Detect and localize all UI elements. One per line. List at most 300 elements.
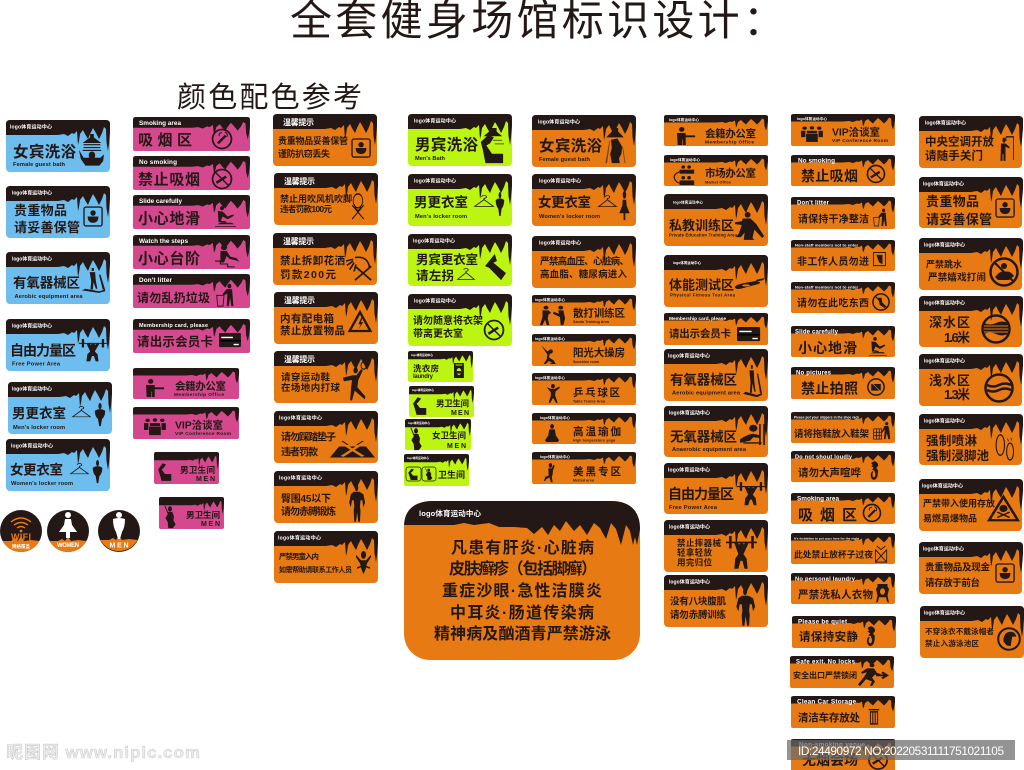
sign: anaerobic orange: logo体育运动中心 xyxy=(669,410,710,416)
sign: membership office pink: 会籍办公室 xyxy=(175,380,226,392)
icon: player xyxy=(547,384,560,403)
sign: cups overnight: 此处禁止放杯子过夜 xyxy=(794,548,873,560)
sign: slippers xyxy=(791,412,895,443)
sign: no boys: logo体育运动中心 xyxy=(278,534,321,542)
sign: table tennis: logo体育运动中心 xyxy=(535,375,565,380)
sign: toilet lime xyxy=(404,454,469,486)
sign: turn left lime: 男宾更衣室 xyxy=(416,252,478,267)
sign: membership card orange xyxy=(664,313,768,345)
sign: no shower disassembly: 罚款200元 xyxy=(280,268,336,281)
sign: shower mandatory: 强制浸脚池 xyxy=(926,448,989,463)
sign: market office xyxy=(664,155,768,186)
sign: hot yoga: High temperature yoga xyxy=(573,438,615,442)
sign: keep clean: 请保持干净整洁 xyxy=(798,212,869,226)
sign: smoke free venue: Non-smoking venue xyxy=(799,742,865,748)
sign: membership office pink xyxy=(133,368,239,399)
sign: men locker: 男更衣室 xyxy=(12,405,66,421)
sign: aerobic area xyxy=(6,252,110,304)
icon: lifter xyxy=(726,536,757,569)
sign: female guest bath: 女宾洗浴 xyxy=(13,142,76,161)
sign: no shower disassembly: 温馨提示 xyxy=(283,236,314,246)
icon: no swim play xyxy=(990,258,1018,286)
sign: no smoking orange: 禁止吸烟 xyxy=(801,168,858,184)
sign: table tennis xyxy=(532,373,636,405)
icon: man xyxy=(413,397,426,415)
sign: staff only xyxy=(791,240,895,271)
sign: no throwing weights xyxy=(664,520,768,572)
sign: shirtless under size xyxy=(274,471,378,523)
sign: smoking orange: 吸 烟 区 xyxy=(798,507,857,524)
heading: colour reference: 颜色配色参考 xyxy=(177,81,362,114)
sign: shower mandatory xyxy=(919,414,1023,465)
sign: membership card pink: Membership card, please xyxy=(139,323,208,329)
icon: feet xyxy=(996,435,1014,460)
sign: shower mandatory: 强制喷淋 xyxy=(926,433,977,448)
sign: membership office orange: Membership Office xyxy=(705,140,754,146)
icon: badminton xyxy=(343,362,366,400)
icon: washer xyxy=(454,363,464,378)
icon: ear xyxy=(867,626,875,646)
notice text xyxy=(434,538,611,643)
sign: women locker orange: logo体育运动中心 xyxy=(539,178,581,184)
icon: door xyxy=(873,252,885,266)
sign: female guest bath: logo体育运动中心 xyxy=(10,124,52,130)
sign: men toilet lime xyxy=(409,386,474,417)
sign: men locker lime xyxy=(408,174,512,226)
sign: no shirtless: 没有八块腹肌 xyxy=(670,596,726,608)
sign: no pictures: No pictures xyxy=(796,370,832,376)
sign: no hair dryer on feet: 禁止用吹风机吹脚 xyxy=(280,193,352,204)
sign: aerobic orange xyxy=(664,349,768,401)
icon: plank xyxy=(735,278,765,289)
sign: no shouting xyxy=(791,451,895,482)
icon: card xyxy=(737,327,760,341)
icon: slip xyxy=(215,206,236,227)
sign: anaerobic orange xyxy=(664,406,768,457)
sign: men locker lime: logo体育运动中心 xyxy=(414,178,456,184)
icon: high voltage xyxy=(350,312,370,331)
sign: tanning: Melted area xyxy=(573,478,594,482)
panel: pool health notice xyxy=(404,501,640,660)
sign: women locker orange: 女更衣室 xyxy=(538,194,591,210)
sign: no personal laundry: No personal laundry xyxy=(795,576,856,582)
badge: women xyxy=(47,510,89,552)
sign: no shower disassembly xyxy=(273,233,377,285)
sign: slide orange xyxy=(791,326,895,357)
sign: men toilet pink 2 xyxy=(159,497,224,529)
icon: no photo xyxy=(868,379,884,395)
sign: valuables notice: 谨防扒窃丢失 xyxy=(278,148,330,159)
sign: sunshine: Sunshine room xyxy=(573,360,599,364)
sign: female guest bath xyxy=(6,120,110,172)
sign: flammables: 易燃易爆物品 xyxy=(923,512,977,524)
sign: mat: 违者罚款 xyxy=(281,446,318,458)
sign: valuables cash: 贵重物品及现金 xyxy=(925,562,990,574)
icon: no eating xyxy=(873,294,889,310)
sign: no personal laundry: 严禁洗私人衣物 xyxy=(798,588,874,601)
icon: weightlifter xyxy=(737,482,765,505)
icon: turn arrow xyxy=(485,254,506,280)
sign: smoking orange xyxy=(791,493,895,524)
sign: laundry lime: logo体育运动中心 xyxy=(411,353,433,357)
sign: men locker lime: Men's locker room xyxy=(415,214,467,220)
sign: female bath orange xyxy=(532,115,636,167)
icon: trash can xyxy=(869,710,879,724)
sign: valuables orange xyxy=(919,177,1023,228)
icon: woman xyxy=(411,428,422,450)
sign: electrical box: 内有配电箱 xyxy=(280,312,334,325)
sign: watch the steps pink: Watch the steps xyxy=(139,238,188,245)
sign: deep water: 1.6米 xyxy=(944,330,970,345)
sign: women locker: Women's locker room xyxy=(11,481,73,487)
sign: no personal laundry xyxy=(791,573,895,604)
sign: no shouting: 请勿大声喧哗 xyxy=(798,466,862,479)
icon: bin xyxy=(217,284,233,306)
sign: no smoking orange: No smoking xyxy=(798,158,835,164)
sign: no jumping: 严禁嬉戏打闹 xyxy=(928,272,986,284)
sign: no throwing weights: logo体育运动中心 xyxy=(669,524,710,530)
sign: men locker: logo体育运动中心 xyxy=(12,386,52,392)
sign: no smoking pink xyxy=(133,156,250,190)
sign: women toilet lime xyxy=(405,419,471,450)
sign: staff only: Non-staff members not to enter xyxy=(795,242,858,248)
sign: men toilet pink: 男卫生间 xyxy=(180,464,215,475)
badge: wifi: 网络覆盖 xyxy=(12,543,30,550)
sign: swimwear required: 不穿泳衣不戴泳帽者 xyxy=(925,626,994,636)
icon: treadmill xyxy=(743,365,762,397)
icon: meeting xyxy=(144,418,166,435)
sign: deep water: 深水区 xyxy=(929,315,970,330)
sign: deep water xyxy=(919,296,1023,347)
icon: hanger and man xyxy=(73,403,105,426)
sign: watch the steps pink xyxy=(133,235,250,269)
sign: market office: 市场办公室 xyxy=(705,166,756,180)
sign: fitness test xyxy=(664,255,768,307)
icon: muscle man xyxy=(349,484,365,522)
sign: electrical box: 禁止放置物品 xyxy=(280,324,345,337)
sign: free power: Free Power Area xyxy=(12,362,61,368)
sign: no shirtless xyxy=(664,575,768,627)
sign: hot yoga xyxy=(532,413,636,444)
sign: no hanger removal lime xyxy=(408,294,512,346)
icon: pointing person xyxy=(146,379,164,397)
sign: watch the steps pink: 小心台阶 xyxy=(138,250,200,268)
sign: membership office orange: 会籍办公室 xyxy=(705,127,756,140)
icon: muscle man xyxy=(736,588,755,626)
icon: woman xyxy=(165,506,176,528)
icon: hanger and woman xyxy=(599,191,630,220)
sign: slippers: 请将拖鞋放入鞋架 xyxy=(794,428,869,440)
sign: men's bath lime: Men's Bath xyxy=(415,156,446,162)
watermark: id bar: ID:24490972 NO:20220531111751021105 xyxy=(798,744,1004,758)
icon: deep water xyxy=(982,316,1010,342)
sign: membership office pink: Membership Office xyxy=(174,392,224,398)
sign: valuables orange: 贵重物品 xyxy=(926,194,979,209)
sign: mat xyxy=(274,411,378,463)
sign: fitness test: Physical Fitness Test Area xyxy=(670,292,735,298)
sign: slippers: Please put your slippers in the shoe rack xyxy=(794,416,859,420)
sign: sunshine: 阳光大操房 xyxy=(573,346,625,359)
sign: close door: logo体育运动中心 xyxy=(925,120,966,126)
icon: man xyxy=(158,463,171,481)
badge: wifi: WIFI xyxy=(11,532,31,542)
icon: men's shower xyxy=(481,128,504,163)
sign: men toilet pink 2: MEN xyxy=(201,521,220,528)
sign: no eating xyxy=(791,282,895,313)
icon: pointing person xyxy=(677,127,695,145)
icon: safe box xyxy=(84,207,102,226)
icon: crossed box xyxy=(875,546,887,562)
icon: bench press xyxy=(740,424,765,445)
sign: membership card pink: 请出示会员卡 xyxy=(137,334,213,349)
sign: table tennis: Table Tennis Area xyxy=(573,400,605,404)
sign: valuables cash: 请存放于前台 xyxy=(925,577,980,589)
notice text: 皮肤癣疹（包括脚癣） xyxy=(449,559,597,578)
sign: vip orange: logo体育运动中心 xyxy=(797,116,827,121)
sign: no throwing weights: 用完归位 xyxy=(677,558,712,568)
sign: men toilet lime: logo体育运动中心 xyxy=(412,388,434,392)
sign: valuables: logo体育运动中心 xyxy=(12,190,52,196)
sign: turn left lime xyxy=(408,234,512,286)
sign: no boys xyxy=(274,531,378,583)
sign: no smoking orange xyxy=(791,155,895,186)
sign: free power orange: 自由力量区 xyxy=(668,486,734,502)
sign: aerobic orange: logo体育运动中心 xyxy=(668,352,710,360)
sign: men locker: Men's locker room xyxy=(13,425,65,431)
icon: no hanger xyxy=(485,321,503,339)
sign: smoke free venue: 无烟会场 xyxy=(802,752,858,768)
sign: men locker lime: 男更衣室 xyxy=(414,194,468,210)
sign: valuables xyxy=(6,186,110,238)
sign: be quiet: Please be quiet xyxy=(798,618,847,626)
sign: valuables orange: 请妥善保管 xyxy=(926,212,992,227)
sign: vip room pink: VIP洽谈室 xyxy=(175,418,223,432)
sign: free power orange xyxy=(664,463,768,514)
sign: be quiet xyxy=(792,616,896,648)
sign: men locker xyxy=(8,382,112,434)
sign: men toilet pink xyxy=(154,452,219,484)
logo: logo体育运动中心 xyxy=(419,508,482,518)
sign: swimwear required: logo体育运动中心 xyxy=(924,610,965,616)
sign: flammables: 严禁带入使用存放 xyxy=(923,498,995,508)
sign: health restriction xyxy=(532,236,636,288)
icon: hanger and woman xyxy=(71,460,102,483)
sign: men's bath lime xyxy=(408,114,512,166)
sign: sports shoes xyxy=(274,351,378,403)
sign: women locker xyxy=(6,439,110,491)
sign: don't litter pink xyxy=(133,274,250,308)
sign: no shower disassembly: 禁止拆卸花洒 xyxy=(280,254,346,267)
sign: valuables orange: logo体育运动中心 xyxy=(923,180,964,188)
sign: no jumping: 严禁跳水 xyxy=(926,258,962,270)
sign: free power: logo体育运动中心 xyxy=(12,322,52,330)
sign: be quiet: 请保持安静 xyxy=(799,630,858,644)
sign: sanda: Sanda Training Area xyxy=(573,320,609,324)
header band xyxy=(404,501,640,545)
icon: ear xyxy=(871,461,878,480)
icon: coach xyxy=(735,212,764,240)
icon: market team xyxy=(674,165,694,185)
icon: slip xyxy=(869,337,887,356)
sign: anaerobic orange: Anaerobic equipment area xyxy=(672,447,747,453)
sign: health restriction: 高血脂、糖尿病进入 xyxy=(540,268,627,280)
sign: health restriction: logo体育运动中心 xyxy=(539,240,581,246)
sign: no jumping: logo体育运动中心 xyxy=(924,242,965,248)
sign: clean car: Clean Car Storage xyxy=(797,698,856,706)
sign: turn left lime: logo体育运动中心 xyxy=(413,238,455,244)
sign: female bath orange: Female guest bath xyxy=(539,157,591,163)
sign: health restriction: 严禁高血压、心脏病、 xyxy=(540,256,629,268)
sign: fitness test: 体能测试区 xyxy=(669,278,734,292)
sign: female guest bath: Female guest bath xyxy=(13,162,66,168)
sign: cups overnight: It's forbidden to put cups here for the night xyxy=(794,536,859,540)
sign: female bath orange: 女宾洗浴 xyxy=(539,136,602,155)
sign: slide orange: Slide carefully xyxy=(795,330,839,336)
sign: women toilet lime: logo体育运动中心 xyxy=(408,421,430,425)
sign: private training: 私教训练区 xyxy=(669,218,734,233)
icon: treadmill xyxy=(82,268,105,293)
sign: swimwear required: 禁止入游泳池区 xyxy=(925,638,979,648)
badge: wifi xyxy=(0,510,42,552)
icon: weightlifter xyxy=(79,339,107,361)
sign: no hanger removal lime: 带离更衣室 xyxy=(413,327,463,340)
icon: child xyxy=(356,551,371,574)
icon: shallow water xyxy=(986,374,1012,402)
sign: toilet lime: 卫生间 xyxy=(438,469,465,480)
sign: electrical box xyxy=(274,292,378,344)
sign: cups overnight xyxy=(791,533,895,564)
sign: free power orange: logo体育运动中心 xyxy=(668,466,710,474)
icon: shoe rack xyxy=(874,422,890,439)
sign: sanda xyxy=(532,295,636,326)
sign: shirtless under size: 臀围45以下 xyxy=(281,493,331,505)
sign: men toilet lime: MEN xyxy=(451,410,469,417)
sign: smoking area pink: Smoking area xyxy=(139,120,181,127)
sign: no hanger removal lime: logo体育运动中心 xyxy=(414,298,456,304)
sign: no throwing weights: 禁止摔器械 xyxy=(677,538,721,548)
icon: running exit xyxy=(858,663,887,686)
sign: membership card orange: Membership card, please xyxy=(669,316,726,322)
sign: membership card pink xyxy=(133,319,250,353)
sign: aerobic area: Aerobic equipment area xyxy=(14,294,83,300)
sign: hot yoga: 高温瑜伽 xyxy=(573,425,621,438)
sign: laundry lime xyxy=(408,351,473,382)
sign: fitness test: logo体育运动中心 xyxy=(673,260,702,265)
sign: no boys: 如需帮助请联系工作人员 xyxy=(279,565,352,574)
badge: men: MEN xyxy=(110,542,128,550)
sign: private training xyxy=(664,194,768,246)
icon: kneeling person xyxy=(544,463,555,482)
sign: valuables: 请妥善保管 xyxy=(14,220,80,235)
icon: fighters xyxy=(540,306,565,325)
sign: slide carefully pink xyxy=(133,195,250,229)
sign: tanning xyxy=(532,452,636,484)
sign: women toilet lime: MEN xyxy=(447,443,466,450)
sign: no smoking pink: 禁止吸烟 xyxy=(138,172,200,188)
icon: hanger xyxy=(458,268,474,279)
sign: private training: logo体育运动中心 xyxy=(673,200,703,204)
sign: vip room pink xyxy=(133,407,239,439)
sign: toilet lime: logo体育运动中心 xyxy=(407,456,429,460)
sign: market office: logo体育运动中心 xyxy=(670,157,700,162)
icon: female shower xyxy=(605,128,625,163)
sign: shallow water: 1.3米 xyxy=(944,387,970,402)
sign: deep water: logo体育运动中心 xyxy=(924,300,965,306)
sign: flammables xyxy=(919,479,1023,531)
sign: valuables cash: logo体育运动中心 xyxy=(923,546,964,552)
sign: membership office orange xyxy=(664,115,768,146)
sign: vip room pink: VIP Conference Room xyxy=(175,431,231,437)
sign: laundry lime: laundry xyxy=(413,374,434,380)
sign: turn left lime: 请左拐 xyxy=(416,268,454,283)
sign: mat: 请勿踩踏垫子 xyxy=(281,430,336,444)
sign: safe exit: Safe exit. No locks xyxy=(796,660,856,666)
sign: clean car xyxy=(791,696,895,728)
icon: laundry xyxy=(876,584,889,603)
sign: close door xyxy=(919,116,1023,168)
sign: free power orange: Free Power Area xyxy=(669,505,718,511)
icon: stairs fall xyxy=(215,245,239,267)
sign: shallow water: 浅水区 xyxy=(929,373,970,388)
watermark: id bar xyxy=(787,740,1015,760)
sign: smoke free venue xyxy=(791,739,895,770)
sign: don't litter pink: 请勿乱扔垃圾 xyxy=(137,290,210,305)
sign: hot yoga: logo体育运动中心 xyxy=(540,415,570,420)
sign: close door: 中央空调开放 xyxy=(925,134,994,148)
sign: flammables: logo体育运动中心 xyxy=(922,482,963,490)
sign: aerobic orange: Aerobic equipment area xyxy=(672,390,741,396)
sign: no smoking pink: No smoking xyxy=(139,159,177,166)
sign: no hair dryer on feet: 温馨提示 xyxy=(284,176,315,186)
sign: shallow water: logo体育运动中心 xyxy=(924,358,965,364)
notice text: 中耳炎·肠道传染病 xyxy=(450,603,594,622)
sign: sanda: 散打训练区 xyxy=(573,306,626,320)
icon: toilet figures xyxy=(406,467,436,481)
sign: vip orange: VIP Conference Room xyxy=(832,138,888,144)
sign: men toilet pink: MEN xyxy=(196,476,215,483)
sign: clean car: 清洁车存放处 xyxy=(798,711,860,724)
sign: keep clean: Don't litter xyxy=(797,200,830,206)
sign: electrical box: 温馨提示 xyxy=(284,295,315,305)
sign: slide carefully pink: 小心地滑 xyxy=(138,210,200,228)
sign: no hanger removal lime: 请勿随意将衣架 xyxy=(413,314,483,327)
icon: safe box xyxy=(352,139,370,157)
sign: sunshine: logo体育运动中心 xyxy=(535,336,565,341)
sign: private training: Private Education Training Area xyxy=(669,232,738,238)
icon: hanger and man xyxy=(475,192,504,216)
sign: no hair dryer on feet: 违者罚款100元 xyxy=(280,204,332,214)
sign: sunshine xyxy=(532,334,636,366)
notice text: 精神病及酗酒青严禁游泳 xyxy=(434,624,611,643)
sign: shirtless under size: logo体育运动中心 xyxy=(279,474,322,482)
sign: sports shoes: 在场地内打球 xyxy=(281,382,340,394)
sign: no eating: 请勿在此吃东西 xyxy=(797,296,869,310)
sign: smoking area pink xyxy=(133,117,250,151)
icon: no smoking xyxy=(867,165,884,182)
sign: shower mandatory: logo体育运动中心 xyxy=(924,418,965,424)
sign: safe exit xyxy=(790,656,894,688)
badge: men xyxy=(98,510,140,552)
sign: shallow water xyxy=(919,354,1023,406)
sign: valuables notice: 贵重物品妥善保管 xyxy=(278,135,348,146)
sign: membership card orange: 请出示会员卡 xyxy=(669,327,732,340)
sign: tanning: 美黑专区 xyxy=(573,465,622,478)
sign: free power: 自由力量区 xyxy=(10,342,76,358)
sign: no pictures xyxy=(791,367,895,399)
sign: no shirtless: logo体育运动中心 xyxy=(669,578,710,586)
sign: no shirtless: 请勿赤膊训练 xyxy=(670,609,726,621)
sign: men's bath lime: logo体育运动中心 xyxy=(414,118,456,124)
